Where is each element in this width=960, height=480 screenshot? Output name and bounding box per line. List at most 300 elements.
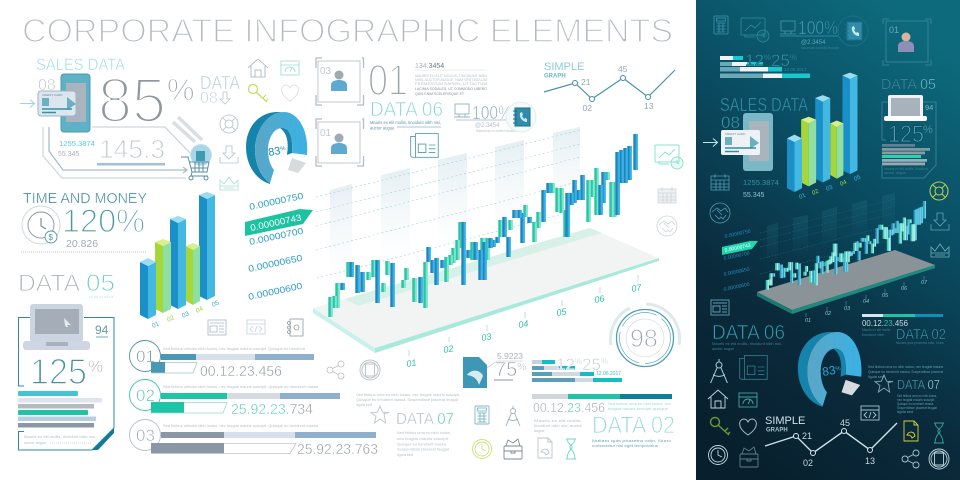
x axis labels: 01: [805, 318, 811, 324]
divider: [21, 251, 147, 253]
labels: percentages: 12: [745, 51, 764, 70]
icon: lifebuoy: [220, 115, 238, 133]
text block: data 07: ligula sed: [897, 410, 913, 414]
frame: [882, 102, 936, 178]
icons: dark top: [710, 16, 949, 257]
diagonal bars: [173, 117, 202, 142]
date: 12.06.2017: [596, 371, 621, 377]
text block: data 07: [897, 394, 938, 414]
icon: download: [220, 146, 238, 163]
text block: star: Sed finibus urna eu nibh luctus, nec feugiat mauris suscipit.: [356, 393, 460, 397]
text block: 134.3454: 134.3454: [415, 63, 444, 70]
axis ticks: [409, 275, 638, 356]
data labels: [581, 64, 654, 113]
data labels: 02: [803, 458, 813, 468]
text line: Sed finibus ultricies nibh luctus, nec feugiat mauris suscipit. Quisque eu hendrerit: [163, 347, 306, 351]
bar labels: 03: [825, 184, 834, 193]
x axis labels: 07: [921, 280, 928, 286]
text block: Mauris ex elit mollis, tincidunt nibh nisi,: [24, 435, 96, 439]
badge number: 03: [136, 426, 155, 445]
number: 85: 85: [98, 66, 166, 136]
y axis labels: 0.00000750: [248, 191, 304, 212]
icon: phone and credit card: CREDIT CARD: [725, 132, 746, 136]
icon: handshake: [657, 216, 677, 236]
x axis labels: 02: [825, 311, 831, 317]
icon: at-sign notebook: [288, 319, 303, 336]
icon: star: [875, 375, 893, 392]
shaded columns: [330, 127, 580, 280]
labels: percentages: %: [601, 357, 608, 366]
text block: tincidunt nibh: [862, 333, 884, 337]
number: 125: 125: [30, 351, 87, 392]
line chart: [765, 423, 897, 453]
y axis labels: [722, 229, 758, 293]
bar labels: 05: [853, 174, 862, 183]
icon: briefcase: [740, 447, 758, 467]
value: 00.12.23.456: [533, 400, 605, 415]
donut chart: 83%: [246, 112, 307, 184]
underline: [89, 296, 114, 298]
number: 55.345: 55.345: [743, 192, 765, 199]
percent sign: %: [167, 72, 195, 107]
bar labels: [151, 299, 221, 330]
icon: clock with dollar: $: [48, 233, 54, 242]
text block: data 07: [397, 431, 451, 457]
icon: calendar: [658, 187, 676, 203]
number: 75%: 75: [495, 359, 517, 381]
donut label: 83: [267, 145, 282, 159]
y axis labels: 0.00000743: [724, 243, 751, 254]
icon: star: [371, 406, 389, 423]
text block: tincidunt nibh nisi, auctor: [534, 424, 583, 428]
bar labels: 02: [166, 314, 176, 324]
text block: data 07: nec feugiat mauris suscipit.: [897, 398, 935, 402]
number: 01: 01: [368, 56, 408, 105]
number: 94: 94: [95, 323, 109, 337]
horizontal bars: [18, 391, 102, 428]
y axis labels: 0.00000600: [723, 282, 750, 293]
bar labels: 02: [811, 188, 820, 197]
icon: news: [740, 356, 767, 379]
icon: compass: [711, 359, 727, 383]
text line: Sed finibus ultricies nibh luctus, nec feugiat mauris suscipit. Quisque eu hendrerit massa: [163, 424, 319, 428]
badge number: 02: [136, 386, 155, 405]
number: 55.345: 55.345: [58, 151, 80, 158]
heading: time and money: TIME AND MONEY: [23, 191, 147, 207]
icon: phone and credit card: [38, 74, 90, 132]
bar labels: 03: [181, 310, 191, 320]
x axis labels: 04: [863, 299, 869, 305]
value: 00.12.23.456: [862, 319, 909, 328]
percent sign: %: [923, 124, 933, 136]
number: @2.3454: Maecenas eu mollis tincidunt: [801, 46, 840, 50]
number: @2.3454: Maecenas eu mollis tincidunt: [476, 129, 517, 133]
icon: clock: [472, 440, 492, 458]
icon: briefcase: [504, 439, 522, 459]
heading: data 05: DATA: [18, 270, 80, 297]
heading: sales data: SALES DATA: [36, 55, 126, 74]
icon: share: [327, 361, 344, 379]
text block: star: Sed finibus urna eu nibh luctus, nec feugiat mauris: [868, 365, 943, 369]
title: CORPORATE INFOGRAPHIC ELEMENTS: [22, 12, 673, 49]
y axis labels: [245, 191, 313, 302]
text block: star: [868, 365, 944, 379]
data labels: 21: [581, 77, 591, 87]
panel: data 05: [18, 270, 115, 450]
heading: simple: SIMPLE: [765, 415, 805, 427]
frame: [18, 318, 114, 450]
donut chart: 83%: [798, 332, 862, 407]
bar chart: 3d bars: [787, 73, 862, 201]
badge: [130, 380, 160, 410]
icon: newspaper: [711, 300, 729, 315]
labels: percentages: 25: [582, 355, 601, 374]
text block: auctor augue: [24, 441, 46, 445]
icon: browser gauge: [281, 61, 299, 75]
icon: home: [248, 59, 268, 77]
icon: laptop: [23, 304, 90, 350]
icon: crown: [220, 177, 238, 190]
y axis labels: 0.00000743: [249, 212, 302, 233]
heading: data 02: DATA 02: [592, 412, 675, 439]
number: 94: 94: [925, 103, 933, 112]
x axis labels: [406, 282, 643, 369]
line: [780, 35, 838, 37]
data points: [572, 76, 650, 102]
text block: data 07: Quisque eu hendrerit massa.: [397, 442, 447, 446]
labels: percentages: %: [575, 357, 582, 366]
value: 25.92.23.763: [297, 441, 378, 458]
icon: code window: [861, 406, 879, 420]
marker: highlighted value: [722, 241, 758, 255]
text block: star: Quisque eu hendrerit massa. Suspendisse placerat feugiat: [356, 398, 459, 402]
icon: phone and credit card: [721, 113, 773, 171]
gauge: 98: [610, 304, 680, 366]
panel: time and money: [21, 191, 147, 252]
icons: top column: [220, 59, 299, 190]
text block: Mauris ex elit mollis,: [534, 419, 582, 423]
gauge: 98: 98: [630, 325, 658, 353]
number: @2.3454: @2.3454: [475, 123, 500, 129]
data labels: 45: [840, 418, 850, 428]
row 01: [130, 340, 314, 380]
text block: Mauris ex elit mollis,: [862, 328, 891, 332]
progress bars: 12% 25%: [720, 51, 810, 78]
x axis labels: 01: [406, 357, 417, 369]
text line: feugiat mauris suscipit quisque: [608, 407, 668, 411]
progress tag: [151, 362, 197, 373]
x axis labels: 02: [443, 343, 454, 355]
heading: data 07: DATA 07: [396, 411, 454, 428]
x axis labels: 03: [481, 331, 492, 343]
data labels: [802, 418, 875, 468]
text block: star: ligula sed: [356, 403, 372, 407]
heading: data 07: DATA 07: [897, 377, 940, 392]
icon: code window: [247, 320, 265, 334]
icon: clipboard circle: [360, 360, 380, 380]
number: 100%: 100%: [798, 18, 838, 38]
icon: heart: [282, 85, 298, 101]
data labels: 02: [582, 103, 592, 113]
donut label: %: [280, 146, 287, 153]
text block: 134.3454: LACINIA SODALES, UT COMMODO LIBERO: [415, 87, 487, 91]
profile frame: 03: [316, 58, 364, 105]
text block: data 07: Quisque eu hendrerit massa.: [897, 402, 934, 406]
main chart: [245, 127, 659, 369]
x axis labels: 03: [844, 306, 851, 312]
text block: [534, 419, 583, 433]
main chart: [722, 193, 935, 324]
y axis labels: 0.00000750: [724, 229, 751, 240]
donut label: 83: [821, 363, 837, 379]
heading: data 05: DATA 05: [881, 77, 936, 93]
icon: clock: [708, 446, 728, 464]
icon: share: [902, 450, 919, 468]
platform: [757, 250, 935, 314]
text block: data 07: Suspendisse placerat feugiat: [397, 448, 450, 452]
text block: [24, 435, 96, 445]
circuit lines: [43, 127, 190, 178]
heading: sales data: SALES DATA: [720, 95, 808, 115]
underline: [96, 336, 108, 338]
icon: heart: [740, 419, 756, 435]
shaded columns: [767, 193, 895, 265]
panel: data 05: [881, 77, 936, 178]
text block: auctor augue: [884, 171, 906, 175]
heading: simple: SIMPLE: [544, 61, 584, 73]
badge: [130, 340, 160, 372]
text block: 134.3454: MAURIS EU ELIT MOLLIS, TINCIDUNT NIBH: [415, 74, 487, 78]
donut label: %: [835, 366, 842, 373]
icon: arrow: [703, 138, 718, 146]
profile frame: 01: 01: [889, 25, 899, 35]
panel: data 02: [532, 394, 675, 448]
marker: highlighted value: [245, 209, 313, 236]
data labels: 13: [644, 101, 654, 111]
number: 100%: 100%: [472, 103, 512, 123]
progress tag: [151, 443, 296, 454]
icon: chart and clock: [655, 145, 683, 169]
text block: 134.3454: QUIS ENIM SCELERISQUE ET: [415, 92, 465, 96]
icon: calendar: [711, 174, 729, 190]
text block: data 06: Mauris ex elit mollis, tincidunt nibh nisi,: [712, 342, 782, 346]
date: 12.06.2017: [784, 67, 807, 72]
stacked bar: [532, 394, 672, 399]
text block: Nullam quis pharetra odio, Nunc: [896, 341, 944, 345]
icon: handshake: [710, 203, 730, 223]
text block: 134.3454: FERMENTUM SAPIEN, UT DICTUM: [415, 82, 487, 86]
text block: star: [356, 393, 460, 407]
text block: star: ligula sed: [868, 375, 884, 379]
icon: clipboard circle: [929, 449, 949, 469]
y axis labels: 0.00000700: [723, 251, 750, 262]
stacked bar: [161, 393, 340, 399]
text block: Nullam quis pharetra odio, Nunc: [592, 439, 671, 443]
icon: phone book: [506, 102, 536, 132]
number: 1255.3874: 1255.3874: [59, 141, 95, 148]
progress tag: [151, 402, 227, 413]
progress bars: 12% 25%: [532, 355, 622, 382]
icon: key: [710, 418, 730, 435]
text block: [884, 167, 929, 175]
icon: monitor: [780, 21, 796, 34]
heading accent: 05: 05: [86, 270, 115, 297]
label: data 08: [200, 73, 240, 107]
text block: 134.3454: NISIL AUCTOR AUGUE. NAM VESTIBULUM: [415, 78, 487, 82]
heading: data 06: DATA 06: [712, 322, 785, 344]
data labels: 21: [802, 431, 812, 441]
number: 125: 125: [888, 121, 924, 148]
x axis labels: [805, 280, 928, 324]
text block: data 07: Suspendisse placerat feugiat: [897, 406, 938, 410]
dark panel: [696, 0, 960, 480]
x axis labels: 05: [556, 306, 568, 318]
labels: percentages: 12: [556, 355, 575, 374]
y axis labels: 0.00000650: [723, 267, 750, 278]
bar labels: 01: [151, 320, 161, 330]
text block: data 07: Sed finibus urna eu nibh luctus,: [397, 431, 451, 435]
axis ticks: [806, 276, 924, 317]
icons: bottom group: [472, 406, 576, 459]
bar labels: [798, 174, 862, 201]
data labels: 13: [865, 456, 875, 466]
number: 145.3: 145.3: [99, 134, 165, 164]
horizontal bars: [882, 144, 930, 165]
text block: star: Quisque eu hendrerit massa. Suspendisse placerat: [868, 370, 944, 374]
connector: [487, 361, 523, 368]
line chart: [544, 70, 675, 99]
row 02: [130, 380, 340, 418]
bar labels: 04: [195, 305, 205, 315]
icon: newspaper: [208, 320, 226, 335]
bar labels: 04: [839, 179, 848, 188]
bar labels: 01: [798, 192, 807, 201]
labels: percentages: %: [764, 53, 771, 62]
number: 20.826: 20.826: [66, 238, 98, 250]
icon: download: [931, 213, 949, 230]
profile frame: 01: [316, 119, 364, 166]
dashed lines: [316, 130, 580, 278]
text block: data 07: ligula sed: [397, 453, 413, 457]
icon: home: [708, 390, 728, 408]
panel: data 02: [862, 314, 946, 345]
profile frame: 03: 03: [320, 66, 332, 77]
platform: [313, 228, 659, 353]
text block: data 06: [370, 120, 441, 130]
panel: sales data: [20, 55, 240, 180]
icon: browser gauge: [739, 393, 757, 407]
icon: hourglass: [566, 439, 576, 459]
text block: data 06: auctor augue: [370, 126, 395, 130]
icons: dark lower left: [708, 300, 949, 469]
x axis labels: 06: [594, 293, 605, 305]
icon: document: [904, 421, 918, 441]
stacked bar: [161, 432, 376, 438]
dashed lines: [760, 199, 895, 274]
text line: Sed finibus ultricies nibh luctus, nec feugiat mauris suscipit. Quisque eu hendrerit massa: [163, 385, 319, 389]
text block: data 07: Sed finibus urna eu nibh luctus,: [897, 394, 937, 398]
simple graph: [544, 61, 675, 113]
number: @2.3454: [475, 123, 517, 133]
subheading: graph: GRAPH: [766, 428, 788, 434]
number: @2.3454: @2.3454: [801, 40, 826, 46]
badge number: 01: [136, 347, 155, 366]
simple graph: [765, 415, 897, 468]
icon: key: [248, 84, 268, 102]
bar chart: 3d bars: [140, 192, 221, 330]
value: 25.92.23.734: [231, 401, 313, 418]
text block: data 06: Mauris ex elit mollis, tincidunt nibh nisi,: [370, 120, 441, 125]
heading: data 06: DATA 06: [370, 99, 443, 121]
text block: data 07: nec feugiat mauris suscipit.: [397, 437, 449, 441]
text block: Mauris ex elit mollis, tincidunt: [884, 167, 929, 171]
bar labels: 05: [211, 299, 221, 309]
label: data 08: DATA: [200, 73, 240, 93]
label: 08: 08: [721, 113, 740, 132]
text block: consectetur nisi eget temporarius: [592, 444, 658, 448]
text block: augue: [534, 429, 545, 433]
icon: laptop: [884, 95, 927, 121]
text block: data 06: auctor augue: [712, 347, 734, 351]
icon: cart: [181, 144, 212, 180]
icon: document: [538, 438, 552, 458]
icon: news: [411, 134, 438, 157]
number: 1255.3874: 1255.3874: [743, 180, 779, 187]
icon: chart and clock: [741, 18, 769, 42]
stacked bar: [161, 354, 314, 360]
underline: [97, 163, 165, 166]
underline: [494, 379, 513, 381]
profile frame: 01: 01: [320, 128, 332, 139]
x axis labels: 04: [518, 318, 529, 330]
profile frame: 01: [883, 19, 931, 65]
text line: [608, 402, 671, 411]
stacked bar: [862, 314, 943, 317]
number: 5.9223: 5.9223: [497, 352, 524, 361]
labels: percentages: 25: [771, 51, 790, 70]
data labels: 45: [618, 64, 628, 74]
text block: 134.3454: [415, 63, 487, 96]
icon: file chart: [463, 357, 487, 388]
heading: data 02: DATA 02: [896, 326, 946, 343]
icon: calculator: [475, 406, 489, 424]
icon: monitor: [454, 104, 470, 117]
corner accent: [92, 428, 114, 450]
icon: calculator: [714, 16, 728, 34]
line: [456, 119, 512, 121]
icon: phone book: [838, 16, 868, 46]
y axis labels: 0.00000600: [247, 281, 303, 302]
number: 120%: 120%: [62, 203, 145, 239]
y axis labels: 0.00000700: [248, 226, 304, 247]
labels: percentages: %: [790, 53, 797, 62]
percent sign: %: [88, 357, 103, 376]
icon: hourglass: [934, 423, 944, 443]
text block: [862, 328, 891, 337]
y axis labels: 0.00000650: [247, 253, 303, 274]
label: 08: 08: [38, 77, 56, 94]
icon: lifebuoy: [930, 182, 948, 200]
icon: phone and credit card: CREDIT CARD: [42, 93, 63, 97]
icon: arrow: [20, 100, 34, 108]
number: @2.3454: [801, 40, 840, 50]
icon: compass: [506, 406, 520, 426]
candlestick bars: [767, 201, 925, 290]
value: 00.12.23.456: [200, 364, 282, 380]
icon: crown: [931, 244, 949, 257]
row 03: [130, 420, 378, 458]
x axis labels: 06: [901, 286, 908, 292]
